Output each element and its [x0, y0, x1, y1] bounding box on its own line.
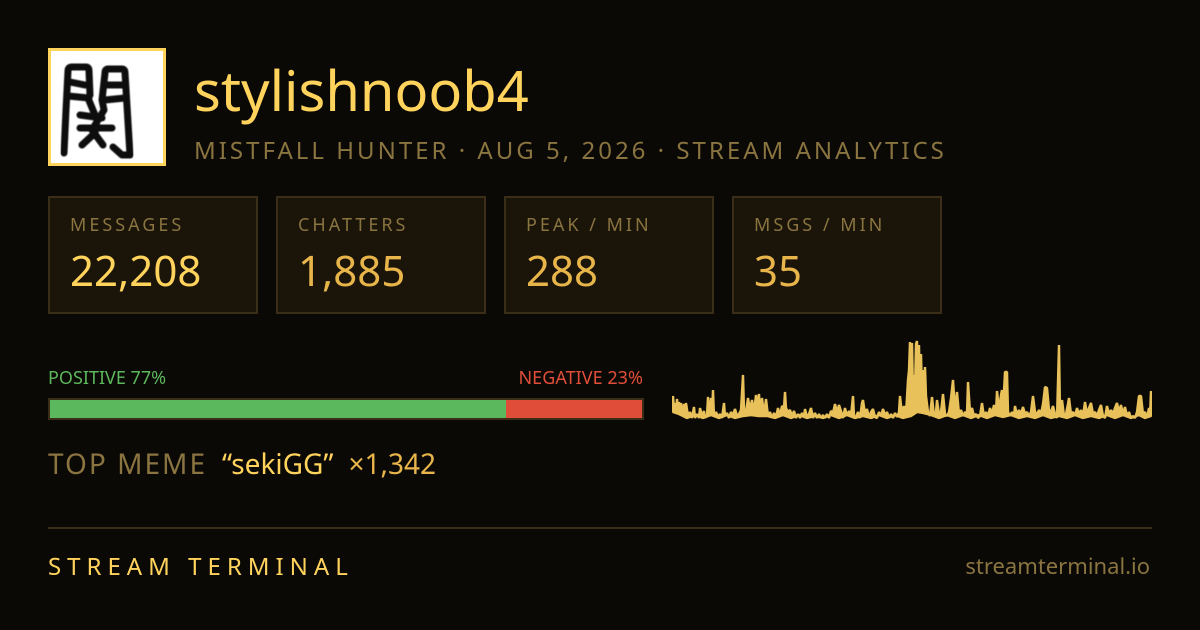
stat: messages per minute: 35 — [754, 242, 802, 299]
negative label: NEGATIVE 23% — [518, 366, 643, 390]
top meme: TOP MEME “sekiGG” ×1,342 — [48, 445, 436, 483]
stat: messages per minute: MSGS / MIN — [754, 213, 885, 237]
title: stylishnoob4 — [194, 52, 529, 128]
sentiment bar — [48, 398, 644, 420]
avatar — [48, 48, 166, 166]
website: streamterminal.io — [965, 551, 1150, 581]
stat: messages: MESSAGES — [70, 213, 184, 237]
stat: peak per minute — [504, 196, 714, 314]
stat: chatters: CHATTERS — [298, 213, 408, 237]
subtitle: MISTFALL HUNTER · AUG 5, 2026 · STREAM ANALYTICS — [194, 134, 947, 167]
stat: messages: 22,208 — [70, 242, 201, 299]
divider — [48, 527, 1152, 529]
brand: STREAM TERMINAL — [48, 550, 354, 583]
stat: messages — [48, 196, 258, 314]
sparkline chart — [672, 340, 1152, 420]
stat: messages per minute — [732, 196, 942, 314]
stat: chatters: 1,885 — [298, 242, 405, 299]
stat: peak per minute: 288 — [526, 242, 598, 299]
positive label: POSITIVE 77% — [48, 366, 166, 390]
stat: chatters — [276, 196, 486, 314]
stat: peak per minute: PEAK / MIN — [526, 213, 652, 237]
